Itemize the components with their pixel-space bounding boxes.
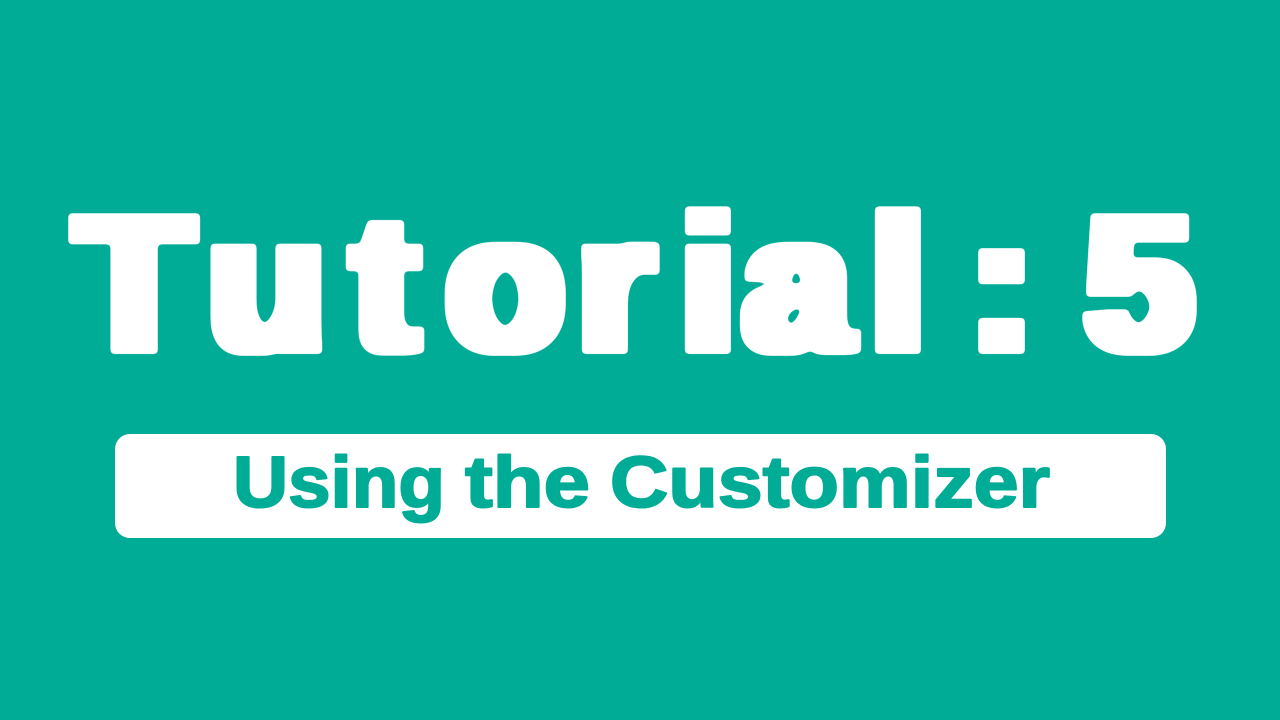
- banner background: [115, 434, 1166, 538]
- subtitle text: Customizer: [610, 443, 1050, 523]
- subtitle banner: [115, 434, 1166, 538]
- subtitle text: Using: [233, 443, 445, 523]
- title: Tutorial : 5: [76, 178, 1192, 390]
- subtitle text: the: [465, 443, 590, 523]
